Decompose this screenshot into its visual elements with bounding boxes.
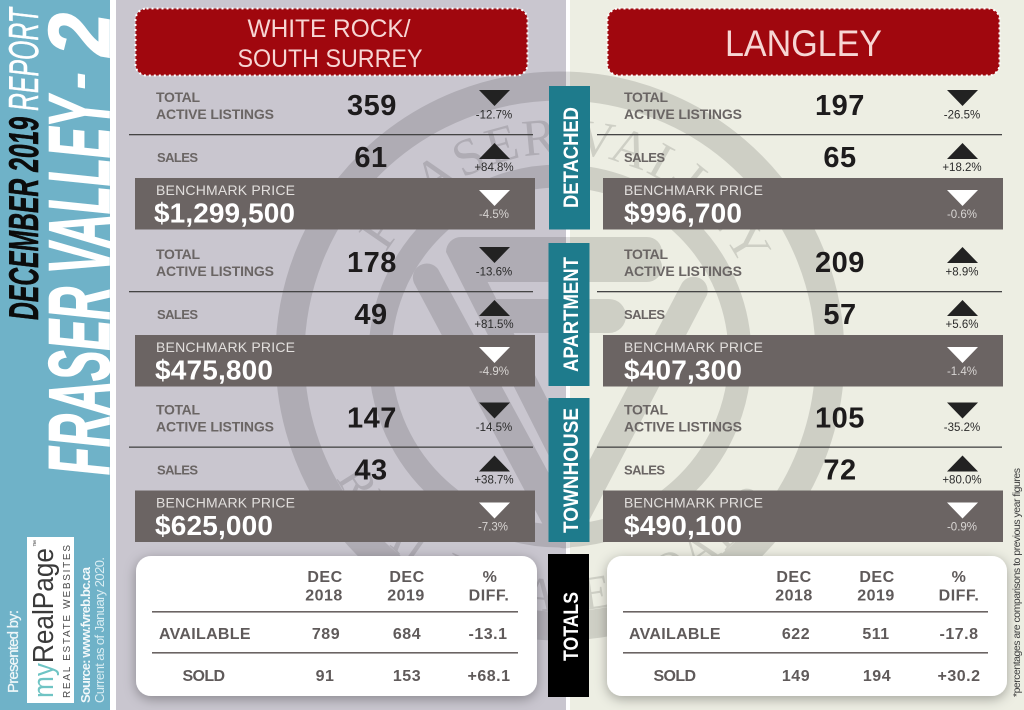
panel: Langley apartment: 57 xyxy=(823,299,857,331)
heading: White Rock / South Surrey: SOUTH SURREY xyxy=(238,45,423,73)
table: Langley totals: +30.2 xyxy=(938,668,980,685)
table: White Rock totals: DEC xyxy=(307,569,343,586)
panel: White Rock townhouse: 43 xyxy=(354,454,388,486)
logo: myRealPage: ™ xyxy=(33,540,40,547)
presented by: Presented by: xyxy=(5,610,22,693)
panel: Langley apartment: ACTIVE LISTINGS xyxy=(624,263,742,279)
panel: White Rock townhouse: +38.7% xyxy=(474,474,514,486)
table: White Rock totals: -13.1 xyxy=(469,626,507,643)
table: White Rock totals: +68.1 xyxy=(468,668,510,685)
panel: Langley townhouse: BENCHMARK PRICE xyxy=(624,494,763,510)
panel: White Rock townhouse: -7.3% xyxy=(478,522,508,534)
panel: sidebar xyxy=(0,0,128,710)
panel: White Rock apartment xyxy=(129,246,535,386)
label: Detached: DETACHED xyxy=(560,107,583,208)
panel: White Rock detached: -4.5% xyxy=(479,209,509,221)
table: White Rock totals: 91 xyxy=(316,668,334,685)
heading: White Rock / South Surrey xyxy=(136,8,528,76)
panel: White Rock detached: 359 xyxy=(347,90,397,122)
panel: White Rock apartment: 49 xyxy=(354,299,388,331)
source: Source: www.fvreb.bc.ca xyxy=(78,566,93,703)
logo: myRealPage xyxy=(27,537,74,703)
panel: Langley townhouse: TOTAL xyxy=(624,402,668,418)
panel: White Rock townhouse: -14.5% xyxy=(476,422,512,434)
panel: White Rock apartment: ACTIVE LISTINGS xyxy=(156,263,274,279)
panel: Langley apartment: SALES xyxy=(624,307,665,322)
label: Apartment: APARTMENT xyxy=(560,257,583,372)
table: White Rock totals: 684 xyxy=(393,626,421,643)
panel: Langley apartment: +5.6% xyxy=(946,319,978,331)
table: White Rock totals: 789 xyxy=(312,626,340,643)
panel: Langley apartment: -1.4% xyxy=(947,366,977,378)
panel: Langley detached: 197 xyxy=(815,90,865,122)
panel: White Rock apartment: BENCHMARK PRICE xyxy=(156,339,295,355)
table: Langley totals: 511 xyxy=(862,626,890,643)
panel: White Rock townhouse: $625,000 xyxy=(155,510,273,541)
panel: White Rock townhouse: BENCHMARK PRICE xyxy=(156,494,295,510)
heading: Langley xyxy=(608,8,1000,76)
panel: Langley townhouse: SALES xyxy=(624,462,665,478)
table: Langley totals: 194 xyxy=(863,668,891,685)
label: Detached xyxy=(549,86,590,230)
panel: Langley townhouse: -35.2% xyxy=(944,422,980,434)
panel: Langley apartment: 209 xyxy=(815,247,865,279)
panel: White Rock apartment: $475,800 xyxy=(155,354,273,386)
panel: White Rock detached: $1,299,500 xyxy=(154,198,295,228)
panel: Langley detached: 65 xyxy=(823,142,857,174)
panel: White Rock apartment: -4.9% xyxy=(479,366,509,378)
panel: Langley townhouse: -0.9% xyxy=(947,522,977,534)
table: White Rock totals: 153 xyxy=(393,668,421,685)
panel: Langley townhouse: +80.0% xyxy=(942,474,982,486)
panel: White Rock detached: SALES xyxy=(157,150,198,165)
footnote: *percentages are comparisons to previous year figures xyxy=(1011,468,1023,697)
panel: Langley detached: ACTIVE LISTINGS xyxy=(624,106,742,122)
table: Langley totals: AVAILABLE xyxy=(629,626,721,643)
table: White Rock totals: DEC xyxy=(389,569,425,586)
panel: Langley apartment xyxy=(597,246,1003,386)
panel: White Rock apartment: SALES xyxy=(157,307,198,322)
panel: White Rock detached: +84.8% xyxy=(474,162,514,174)
panel: White Rock detached: TOTAL xyxy=(156,89,200,105)
logo: myRealPage: myRealPage xyxy=(28,548,60,698)
logo: myRealPage: REAL ESTATE WEBSITES xyxy=(62,545,73,698)
table: Langley totals: -17.8 xyxy=(940,626,978,643)
panel: White Rock apartment: -13.6% xyxy=(476,266,512,278)
panel: White Rock detached: -12.7% xyxy=(476,110,512,122)
table: White Rock totals xyxy=(136,556,537,696)
label: Townhouse: TOWNHOUSE xyxy=(560,408,583,533)
panel: White Rock detached: ACTIVE LISTINGS xyxy=(156,106,274,122)
panel: White Rock apartment: TOTAL xyxy=(156,246,200,262)
panel: White Rock detached: BENCHMARK PRICE xyxy=(156,182,295,198)
watermark: Fraser Valley Real Estate Board seal: FRASER VALLEY xyxy=(358,120,772,258)
panel: Langley detached: SALES xyxy=(624,150,665,165)
title: number 2: 2 xyxy=(32,13,128,58)
panel: Langley detached xyxy=(597,89,1003,230)
table: Langley totals xyxy=(607,556,1007,696)
table: Langley totals: 622 xyxy=(782,626,810,643)
panel: White Rock apartment: 178 xyxy=(347,247,397,279)
panel: White Rock townhouse: TOTAL xyxy=(156,402,200,418)
panel: left background xyxy=(116,0,566,710)
table: Langley totals: DEC xyxy=(859,569,895,586)
table: White Rock totals: DIFF. xyxy=(469,588,509,604)
table: Langley totals: % xyxy=(952,569,966,586)
table: Langley totals: 2018 xyxy=(775,588,813,604)
table: Langley totals: DIFF. xyxy=(939,588,979,604)
table: White Rock totals: % xyxy=(483,569,497,586)
panel: Langley detached: BENCHMARK PRICE xyxy=(624,182,763,198)
panel: Langley detached: -26.5% xyxy=(944,110,980,122)
panel: Langley detached: +18.2% xyxy=(942,162,982,174)
panel: Langley townhouse xyxy=(597,402,1003,542)
panel: Langley townhouse: 105 xyxy=(815,402,865,434)
panel: Langley detached: TOTAL xyxy=(624,89,668,105)
panel: Langley detached: $996,700 xyxy=(624,198,742,228)
panel: Langley apartment: TOTAL xyxy=(624,246,668,262)
panel: Langley townhouse: 72 xyxy=(823,454,857,486)
table: Langley totals: 149 xyxy=(782,668,810,685)
panel: White Rock detached xyxy=(129,89,535,230)
panel: right background xyxy=(570,0,1024,710)
panel: Langley townhouse: ACTIVE LISTINGS xyxy=(624,418,742,434)
label: Apartment xyxy=(548,243,590,386)
table: White Rock totals: 2018 xyxy=(305,588,343,604)
heading: Langley: LANGLEY xyxy=(725,23,882,64)
table: Langley totals: 2019 xyxy=(857,588,895,604)
panel: Langley apartment: +8.9% xyxy=(946,266,978,278)
table: White Rock totals: AVAILABLE xyxy=(159,626,251,643)
panel: Langley detached: -0.6% xyxy=(947,209,977,221)
table: White Rock totals: SOLD xyxy=(182,668,226,685)
watermark: Fraser Valley Real Estate Board seal: REAL ESTATE BOARD xyxy=(336,464,753,611)
label: Totals xyxy=(548,554,589,697)
panel: Langley apartment: BENCHMARK PRICE xyxy=(624,339,763,355)
title: dash: - xyxy=(43,72,110,90)
panel: White Rock apartment: +81.5% xyxy=(474,319,514,331)
date note: Current as of January 2020. xyxy=(92,557,107,703)
panel: Langley townhouse: $490,100 xyxy=(624,510,742,541)
table: White Rock totals: 2019 xyxy=(387,588,425,604)
panel: Langley apartment: $407,300 xyxy=(624,354,742,386)
panel: White Rock townhouse: SALES xyxy=(157,462,198,478)
watermark: Fraser Valley Real Estate Board seal xyxy=(276,72,844,640)
label: Townhouse xyxy=(548,398,590,542)
panel: White Rock townhouse xyxy=(129,402,535,542)
table: Langley totals: DEC xyxy=(776,569,812,586)
label: Totals: TOTALS xyxy=(560,592,583,661)
panel: White Rock townhouse: 147 xyxy=(347,402,397,434)
table: Langley totals: SOLD xyxy=(654,668,696,685)
panel: White Rock townhouse: ACTIVE LISTINGS xyxy=(156,418,274,434)
heading: White Rock / South Surrey: WHITE ROCK/ xyxy=(248,15,411,43)
panel: White Rock detached: 61 xyxy=(354,142,388,174)
